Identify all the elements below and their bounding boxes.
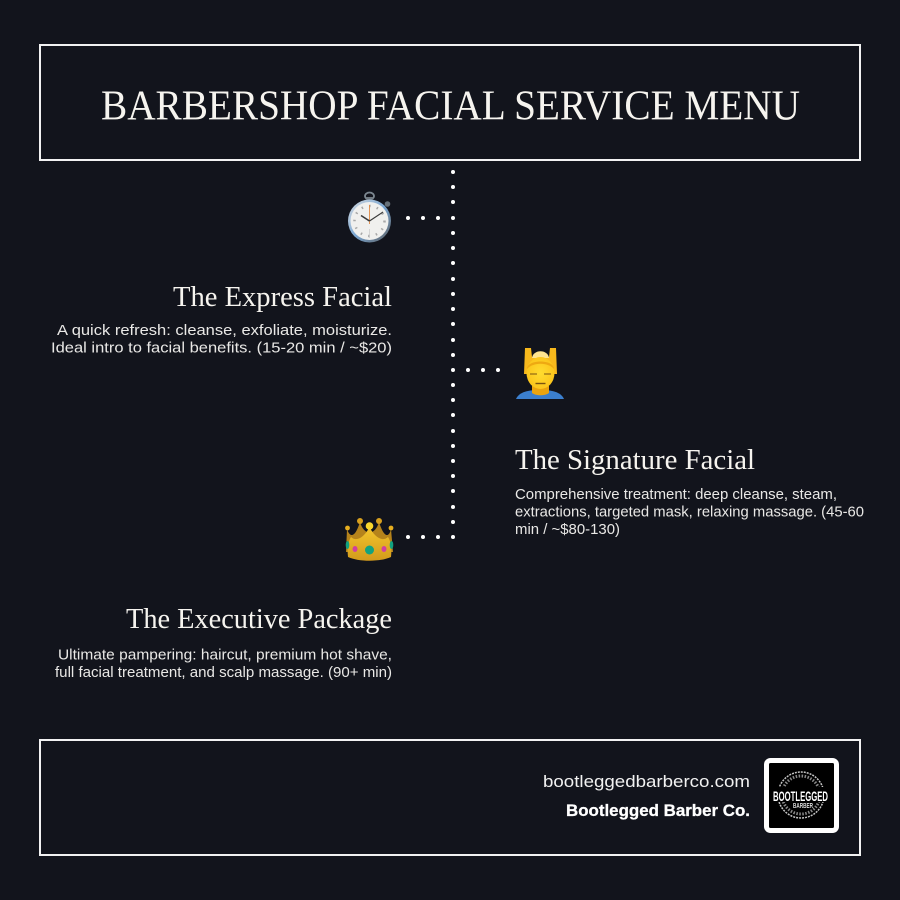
text: signature facial description: extractions, targeted mask, relaxing massage. (45-60 [515,504,864,520]
website url: bootleggedbarberco.com [543,772,750,791]
text: express facial description: A quick refresh: cleanse, exfoliate, moisturize. [57,322,392,339]
panel: the executive package [55,603,392,681]
text: executive package description [55,646,392,681]
logo: bootlegged barber [766,760,836,830]
text: express facial description: Ideal intro to facial benefits. (15-20 min / ~$20) [51,340,392,356]
icon: man getting face massage [516,348,564,399]
brand name: Bootlegged Barber Co. [566,801,750,820]
logo: bootlegged barber: BARBER [793,803,813,810]
panel: the signature facial [515,444,864,538]
logo: bootlegged barber: BOOTLEGGED [773,788,828,804]
text: express facial description [51,322,392,356]
text: signature facial description [515,486,864,538]
icon: stopwatch [348,192,391,242]
title: BARBERSHOP FACIAL SERVICE MENU [101,84,800,130]
text: executive package description: full facial treatment, and scalp massage. (90+ min) [55,664,392,681]
icon: crown [345,518,393,561]
title banner [40,45,860,160]
heading: the express facial: The Express Facial [173,281,392,313]
heading: the signature facial: The Signature Facial [515,444,755,476]
text: signature facial description: min / ~$80-130) [515,521,620,538]
dotted timeline [406,170,500,539]
heading: the executive package: The Executive Package [126,603,392,635]
panel: the express facial [51,281,392,356]
text: executive package description: Ultimate pampering: haircut, premium hot shave, [58,646,392,664]
text: signature facial description: Comprehensive treatment: deep cleanse, steam, [515,486,837,503]
footer panel [40,740,860,855]
